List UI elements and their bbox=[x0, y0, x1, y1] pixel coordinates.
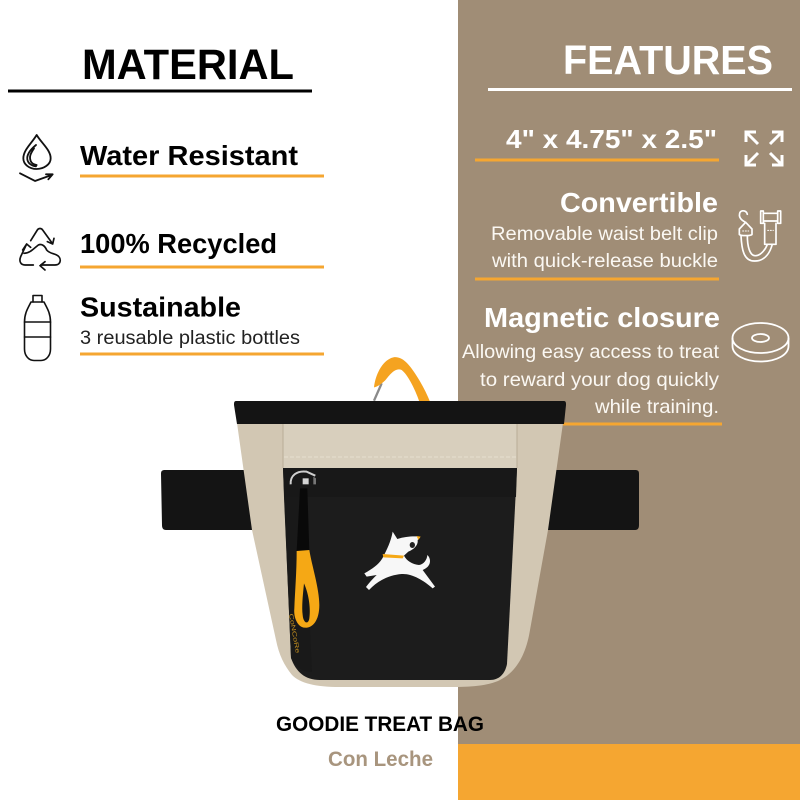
panel: orange footer block bbox=[458, 744, 800, 800]
brand tag: CoNCoRe bbox=[287, 613, 300, 655]
text: water resistant: Water Resistant bbox=[80, 140, 298, 171]
carabiner bbox=[374, 357, 430, 402]
text: magnetic description: while training. bbox=[594, 396, 719, 418]
heading: features: FEATURES bbox=[563, 37, 773, 83]
text: convertible description: with quick-release buckle bbox=[491, 250, 718, 272]
panel: features bbox=[462, 37, 792, 426]
heading: material: MATERIAL bbox=[82, 41, 294, 89]
icon: belt clip bbox=[739, 211, 781, 261]
belt strap bbox=[161, 470, 639, 530]
text: magnetic closure: Magnetic closure bbox=[484, 302, 720, 333]
text: sustainable: Sustainable bbox=[80, 292, 241, 322]
zipper tape side bbox=[284, 497, 312, 672]
text: magnetic description: to reward your dog quickly bbox=[480, 369, 719, 391]
text: dimensions: 4" x 4.75" x 2.5" bbox=[506, 124, 717, 154]
seams and stitching bbox=[283, 424, 517, 468]
panel: features background bbox=[458, 0, 800, 744]
text: convertible description: Removable waist belt clip bbox=[491, 223, 718, 245]
panel: material bbox=[8, 41, 324, 360]
product title: GOODIE TREAT BAG bbox=[276, 713, 484, 736]
icon: expand arrows bbox=[746, 132, 782, 165]
text: magnetic description: Allowing easy access to treat bbox=[462, 341, 720, 363]
text: magnetic description bbox=[462, 341, 720, 418]
product colour name: Con Leche bbox=[328, 748, 433, 771]
text: convertible description bbox=[491, 223, 718, 272]
product: treat bag bbox=[161, 357, 639, 687]
text: 100% recycled: 100% Recycled bbox=[80, 228, 277, 259]
icon: magnet disc bbox=[732, 323, 788, 362]
dog logo bbox=[364, 532, 435, 590]
bag inner panel bbox=[283, 424, 517, 468]
text: convertible: Convertible bbox=[560, 187, 718, 218]
icon: recycle bbox=[20, 228, 60, 270]
icon: bottle bbox=[24, 296, 50, 360]
zipper pull bbox=[291, 471, 319, 628]
top black band bbox=[234, 401, 566, 424]
black pocket bbox=[283, 468, 517, 680]
bag body bbox=[237, 423, 563, 687]
text: reusable bottles: 3 reusable plastic bottles bbox=[80, 328, 300, 349]
icon: water drop bbox=[20, 135, 53, 181]
zipper band bbox=[283, 468, 517, 497]
